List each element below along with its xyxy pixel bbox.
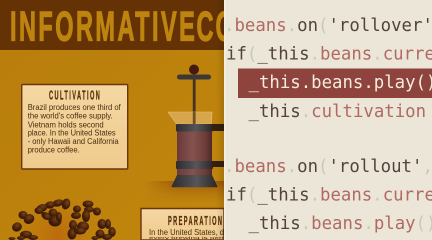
- code block: rollover: .beans.on('rollover': [224, 16, 432, 36]
- code block: rollover: if(_this.beans.curre: [226, 44, 432, 64]
- icon: french press: [150, 64, 224, 197]
- card: preparation: PREPARATION: [168, 215, 222, 229]
- title banner: INFORMATIVE: [10, 3, 195, 50]
- card: cultivation: the world's coffee supply.: [28, 111, 113, 120]
- card: cultivation: - only Hawaii and California: [28, 137, 119, 146]
- panel: code editor: [224, 0, 432, 240]
- card: cultivation: produce coffee.: [28, 145, 80, 154]
- code block: rollout: .beans.on('rollout',: [224, 157, 432, 177]
- code block: rollover: _this.cultivation: [248, 102, 426, 122]
- card: cultivation: [22, 84, 128, 169]
- card: cultivation: CULTIVATION: [49, 89, 100, 103]
- card: preparation: every brewing is perf: [149, 235, 226, 240]
- title letter O, cut off by the code panel: O: [216, 3, 234, 50]
- title banner: C: [196, 3, 213, 50]
- code block: rollover: _this.beans.play(): [248, 73, 432, 93]
- code block: rollover: [224, 16, 432, 122]
- code block: rollout: if(_this.beans.curre: [226, 186, 432, 206]
- code highlight bar: [238, 68, 432, 98]
- code block: rollout: [224, 157, 432, 234]
- panel: infographic background: [0, 0, 226, 240]
- card: preparation: In the United States, d: [149, 228, 224, 237]
- card: cultivation: place. In the United States: [28, 128, 116, 138]
- code block: rollout: _this.beans.play(): [248, 214, 432, 234]
- icon: coffee beans: [8, 198, 116, 240]
- card: cultivation: Vietnam holds second: [28, 120, 104, 129]
- card: preparation: [141, 208, 226, 240]
- card: cultivation: Brazil produces one third of: [28, 103, 121, 112]
